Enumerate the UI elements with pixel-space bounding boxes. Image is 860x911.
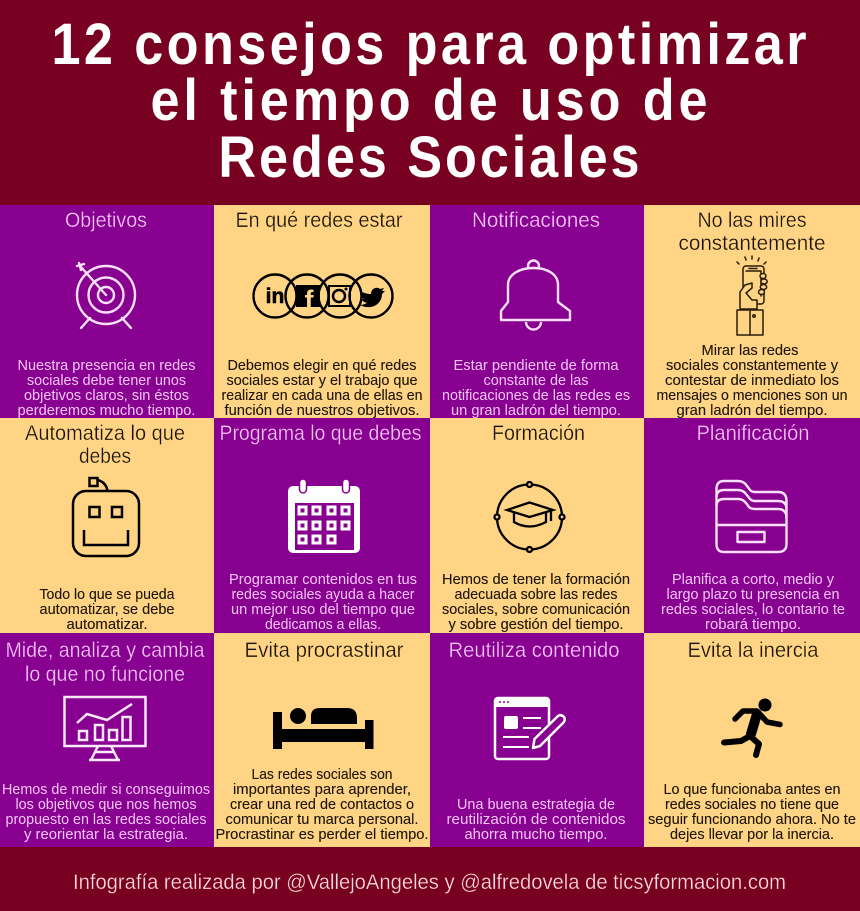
text: No las mires constantemente: Mirar las redes: [702, 343, 798, 359]
panel: Evita procrastinar: [214, 633, 430, 847]
panel: En qué redes estar: [214, 205, 430, 419]
icon: robot face: [73, 478, 139, 556]
heading: Automatiza lo que debes: Automatiza lo que: [25, 421, 185, 445]
text: Notificaciones: notificaciones de las redes es: [442, 388, 630, 404]
icon: social networks: f: [304, 285, 314, 315]
text: No las mires constantemente: [656, 343, 848, 419]
text: En qué redes estar: [222, 358, 422, 419]
icon: hand holding phone: [737, 256, 767, 335]
text: Programa lo que debes: Programar contenidos en tus: [229, 572, 417, 588]
heading: Automatiza lo que debes: debes: [79, 444, 131, 468]
text: Notificaciones: Estar pendiente de forma: [454, 358, 619, 374]
heading: Evita procrastinar: Evita procrastinar: [244, 638, 404, 662]
text: En qué redes estar: función de nuestros objetivos.: [224, 403, 420, 419]
text: Evita la inercia: seguir funcionando ahora. No te: [648, 812, 856, 828]
heading: Programa lo que debes: Programa lo que debes: [220, 421, 422, 445]
text: En qué redes estar: realizar en cada una de ellas en: [222, 388, 422, 404]
icon: chart on monitor: [64, 697, 146, 760]
title: 12 consejos para optimizar: [51, 11, 807, 77]
text: Evita procrastinar: Las redes sociales son: [252, 767, 392, 783]
panel: Objetivos: [0, 205, 214, 419]
title: el tiempo de uso de: [150, 67, 708, 133]
text: Evita procrastinar: Procrastinar es perder el tiempo.: [216, 827, 428, 843]
text: Reutiliza contenido: [446, 797, 626, 843]
text: Mide, analiza y cambia: Hemos de medir si conseguimos: [2, 782, 210, 798]
heading: Reutiliza contenido: Reutiliza contenido: [448, 638, 620, 662]
heading: Automatiza lo que debes: [25, 421, 185, 468]
heading: Objetivos: Objetivos: [65, 208, 147, 232]
text: Mide, analiza y cambia: propuesto en las redes sociales: [6, 812, 206, 828]
text: Formación: y sobre gestión del tiempo.: [448, 617, 624, 633]
text: Objetivos: Nuestra presencia en redes: [18, 358, 196, 374]
heading: Mide, analiza y cambia: lo que no funcione: [25, 662, 185, 686]
text: En qué redes estar: sociales estar y el trabajo que: [226, 373, 418, 389]
icon: bell: [501, 260, 570, 330]
text: Reutiliza contenido: reutilización de contenidos: [446, 812, 626, 828]
heading: Mide, analiza y cambia: Mide, analiza y cambia: [6, 638, 205, 662]
heading: Mide, analiza y cambia: [6, 638, 205, 686]
text: Formación: Hemos de tener la formación: [442, 572, 630, 588]
heading: Planificación: Planificación: [696, 421, 810, 445]
footer credit: Infografía realizada por @VallejoAngeles y @alfredovela de ticsyformacion.com: [73, 871, 786, 894]
icon: folder drawer: [716, 481, 786, 552]
icon: graduation cap: [494, 482, 564, 552]
heading: Evita la inercia: Evita la inercia: [688, 638, 819, 662]
title: [51, 11, 807, 190]
text: Evita la inercia: redes sociales no tiene que: [665, 797, 839, 813]
text: Evita procrastinar: importantes para aprender,: [233, 782, 411, 798]
text: Objetivos: sociales debe tener unos: [27, 373, 186, 389]
text: Programa lo que debes: redes sociales ayuda a hacer: [232, 587, 415, 603]
text: Notificaciones: constante de las: [484, 373, 588, 389]
text: Planificación: Planifica a corto, medio y: [672, 572, 835, 588]
text: Programa lo que debes: dedicamos a ellas.: [265, 617, 381, 633]
icon: running person: [724, 698, 780, 755]
panel: Formación: [430, 418, 644, 633]
text: No las mires constantemente: mensajes o menciones son un: [656, 388, 848, 404]
text: Automatiza lo que debes: automatizar.: [66, 617, 148, 633]
text: Automatiza lo que debes: Todo lo que se pueda: [40, 587, 175, 603]
text: Planificación: largo plazo tu presencia en: [666, 587, 840, 603]
text: En qué redes estar: Debemos elegir en qué redes: [228, 358, 416, 374]
text: Planificación: robará tiempo.: [705, 617, 801, 633]
text: Reutiliza contenido: ahorra mucho tiempo.: [464, 827, 608, 843]
panel: No las mires constantemente: [644, 205, 860, 419]
panel: Reutiliza contenido: [430, 633, 644, 847]
text: Objetivos: objetivos claros, sin éstos: [24, 388, 189, 404]
text: Evita procrastinar: [216, 767, 428, 843]
panel: Notificaciones: [430, 205, 644, 419]
text: Evita procrastinar: crear una red de contactos o: [230, 797, 414, 813]
text: Evita la inercia: dejes llevar por la inercia.: [670, 827, 834, 843]
text: Programa lo que debes: un mejor uso del tiempo que: [231, 602, 415, 618]
panel: Programa lo que debes: [214, 418, 430, 633]
icon: social networks: [254, 274, 392, 318]
text: Reutiliza contenido: Una buena estrategia de: [457, 797, 615, 813]
heading: No las mires constantemente: constantemente: [678, 231, 826, 255]
text: Notificaciones: [442, 358, 630, 419]
text: Mide, analiza y cambia: [2, 782, 210, 843]
text: Automatiza lo que debes: automatizar, se debe: [40, 602, 174, 618]
icon: social networks: in: [266, 285, 284, 308]
text: Formación: adecuada sobre las redes: [454, 587, 618, 603]
heading: No las mires constantemente: No las mires: [698, 208, 806, 232]
icon: calendar: [288, 479, 360, 553]
panel: Evita la inercia: [644, 633, 860, 847]
text: Mide, analiza y cambia: y reorientar la estrategia.: [24, 827, 188, 843]
heading: En qué redes estar: En qué redes estar: [236, 208, 402, 232]
panel: Planificación: [644, 418, 860, 633]
text: Evita la inercia: Lo que funcionaba antes en: [664, 782, 840, 798]
text: Evita procrastinar: comunicar tu marca personal.: [226, 812, 418, 828]
text: Notificaciones: un gran ladrón del tiempo.: [451, 403, 621, 419]
text: Objetivos: [18, 358, 196, 419]
icon: person in bed: [273, 708, 374, 749]
text: Planificación: redes sociales, lo contario te: [661, 602, 845, 618]
text: Mide, analiza y cambia: los objetivos que nos hemos: [16, 797, 196, 813]
heading: Notificaciones: Notificaciones: [472, 208, 600, 232]
heading: No las mires constantemente: [678, 208, 826, 255]
text: No las mires constantemente: gran ladrón del tiempo.: [676, 403, 828, 419]
panel: Mide, analiza y cambia: [0, 633, 214, 847]
text: Evita la inercia: [648, 782, 856, 843]
text: Formación: [442, 572, 630, 633]
heading: Formación: Formación: [492, 421, 585, 445]
text: Planificación: [661, 572, 845, 633]
text: Formación: sociales, sobre comunicación: [442, 602, 630, 618]
text: No las mires constantemente: sociales constantemente y: [666, 358, 839, 374]
text: Automatiza lo que debes: [40, 587, 175, 633]
icon: document and pencil: [495, 698, 565, 759]
icon: target: [77, 263, 135, 328]
panel: Automatiza lo que debes: [0, 418, 214, 633]
text: Programa lo que debes: [229, 572, 417, 633]
text: No las mires constantemente: contestar de inmediato los: [665, 373, 839, 389]
text: Objetivos: perderemos mucho tiempo.: [18, 403, 196, 419]
title: Redes Sociales: [218, 124, 640, 190]
